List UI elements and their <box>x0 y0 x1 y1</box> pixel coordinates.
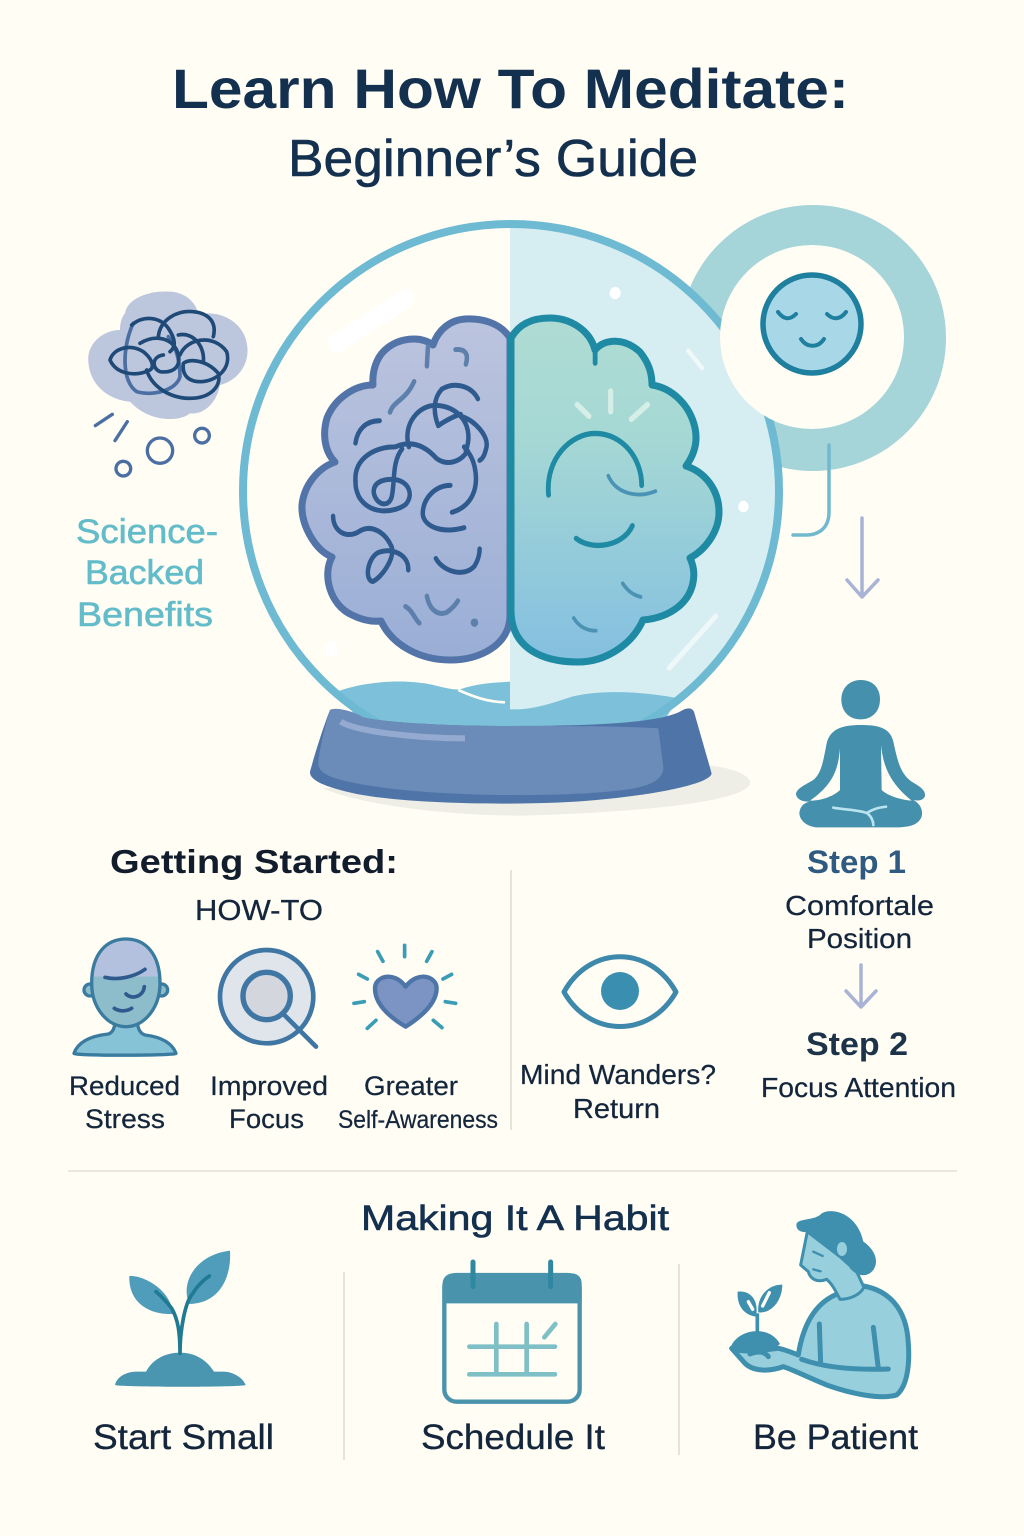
science-backed benefits section <box>76 291 248 634</box>
icon: tangled cloud <box>88 291 248 476</box>
panel: getting started <box>69 843 498 1134</box>
icon: calm face <box>763 275 861 373</box>
label: science-backed benefits: Benefits <box>77 596 213 634</box>
title <box>172 57 849 188</box>
benefit: greater self-awareness: Self-Awareness <box>338 1106 498 1134</box>
habit: be patient: Be Patient <box>753 1418 918 1457</box>
glass right half <box>510 215 790 710</box>
benefit: reduced stress <box>69 939 180 1134</box>
label: science-backed benefits: Backed <box>85 554 204 592</box>
icon: eye <box>564 957 676 1026</box>
water <box>337 682 678 730</box>
habit: start small <box>93 1251 274 1457</box>
step 1: Comfortale <box>785 890 934 921</box>
step 1: Position <box>807 923 912 954</box>
calm face badge <box>720 245 904 429</box>
subheading: how-to: HOW-TO <box>195 895 323 927</box>
glass highlights <box>324 287 749 668</box>
heading: making it a habit: Making It A Habit <box>361 1199 669 1238</box>
glass outline <box>243 224 779 758</box>
benefit: reduced stress: Stress <box>85 1104 165 1134</box>
mind wanders block: Mind Wanders? <box>520 1059 716 1090</box>
heading: getting started: Getting Started: <box>110 843 398 880</box>
arrow step 1 to 2 <box>846 965 876 1007</box>
habit: be patient <box>731 1211 918 1457</box>
panel: steps <box>761 844 956 1103</box>
step 2 <box>761 1026 956 1103</box>
divider <box>510 870 512 1130</box>
benefit: improved focus: Improved <box>210 1071 328 1101</box>
step 1 <box>785 844 934 954</box>
brain left hemisphere <box>302 319 510 660</box>
mind wanders block: Return <box>573 1093 660 1124</box>
glass base <box>310 708 712 804</box>
ring behind globe <box>680 205 946 471</box>
title: Beginner’s Guide <box>288 130 698 188</box>
benefit: improved focus: Focus <box>229 1104 304 1134</box>
brain right hemisphere <box>511 318 719 662</box>
panel: making it a habit <box>93 1199 918 1460</box>
arrow down to meditator <box>847 518 878 597</box>
divider <box>343 1272 345 1460</box>
divider <box>68 1170 957 1172</box>
habit: schedule it: Schedule It <box>421 1418 605 1457</box>
habit: schedule it <box>421 1262 605 1457</box>
benefit: reduced stress: Reduced <box>69 1071 180 1101</box>
title: Learn How To Meditate: <box>172 57 849 120</box>
globe shadow <box>323 765 750 816</box>
mind wanders block <box>520 957 716 1124</box>
label: science-backed benefits: Science- <box>76 513 218 551</box>
label: science-backed benefits <box>76 513 218 634</box>
step 2: Focus Attention <box>761 1072 956 1103</box>
divider <box>678 1264 680 1455</box>
step 1: Step 1 <box>807 844 906 880</box>
icon: meditating figure <box>796 680 925 827</box>
connector line <box>793 445 829 535</box>
benefit: greater self-awareness: Greater <box>364 1071 458 1101</box>
benefit: improved focus <box>210 950 328 1134</box>
globe with brain <box>243 215 790 816</box>
habit: start small: Start Small <box>93 1418 274 1457</box>
step 2: Step 2 <box>806 1026 908 1062</box>
benefit: greater self-awareness <box>338 945 498 1134</box>
